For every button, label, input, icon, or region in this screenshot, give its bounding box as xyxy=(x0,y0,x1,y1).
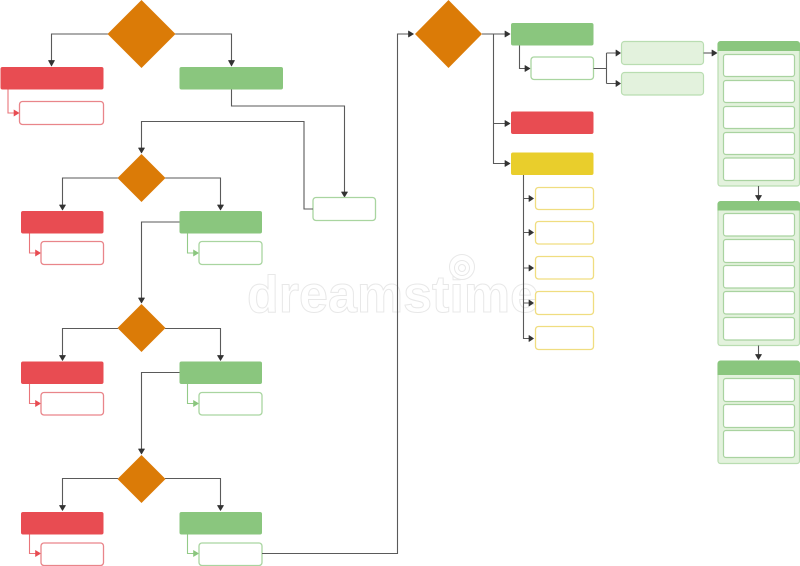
connectors: yellow list xyxy=(524,175,534,342)
panel: left decision chain xyxy=(0,0,376,566)
connector: note to light boxes xyxy=(594,50,620,86)
arrow: light box to panel 1 xyxy=(704,50,717,56)
green outcome box 4 xyxy=(180,512,262,534)
light green box 2 xyxy=(622,72,704,95)
decision diamond 1 xyxy=(108,0,176,68)
green outcome box right xyxy=(511,23,594,46)
green note 3 xyxy=(188,384,262,415)
decision diamond 3 xyxy=(118,304,166,352)
red note 3 xyxy=(30,384,104,415)
red outcome box 3 xyxy=(21,362,104,384)
panel: right decision branch xyxy=(415,0,800,464)
connectors: right decision trunk xyxy=(482,31,510,166)
connector: feedback to decision 2 xyxy=(138,122,313,209)
feedback box xyxy=(313,198,376,220)
yellow outcome box xyxy=(511,152,594,175)
green note right xyxy=(531,57,594,80)
connectors: fourth decision xyxy=(60,478,224,510)
yellow list boxes xyxy=(536,188,594,350)
light green box 1 xyxy=(622,42,704,64)
green note 2 xyxy=(188,234,262,264)
decision diamond 2 xyxy=(118,154,166,202)
red outcome box 1 xyxy=(0,67,104,90)
red outcome box right xyxy=(511,112,594,134)
connector: green to feedback box xyxy=(232,90,348,197)
connector: green to note xyxy=(520,46,530,72)
connectors: third decision xyxy=(60,328,224,360)
red note 1 xyxy=(8,90,104,124)
connectors: second decision xyxy=(60,178,224,210)
panel 1: five-item list xyxy=(718,41,800,186)
arrow: panel 1 to panel 2 xyxy=(756,186,762,200)
decision diamond 4 xyxy=(118,455,166,503)
red note 4 xyxy=(30,534,104,566)
green outcome box 3 xyxy=(180,362,262,384)
red outcome box 2 xyxy=(21,211,104,234)
green outcome box 2 xyxy=(180,211,262,234)
arrow: panel 2 to panel 3 xyxy=(756,346,762,360)
panel 3: three-item list xyxy=(718,360,800,464)
watermark: dreamstime xyxy=(247,266,539,324)
red outcome box 4 xyxy=(21,512,104,534)
connectors: first decision xyxy=(48,34,234,66)
green outcome box 1 xyxy=(180,67,283,90)
red note 2 xyxy=(30,234,104,264)
connector: green 3 to decision 4 xyxy=(138,372,180,454)
arrow: long connector to right decision xyxy=(262,31,414,554)
decision diamond right xyxy=(415,0,482,68)
panel 2: five-item list xyxy=(718,201,800,346)
green note 4 xyxy=(188,534,262,566)
connector: green 2 to decision 3 xyxy=(138,222,180,303)
